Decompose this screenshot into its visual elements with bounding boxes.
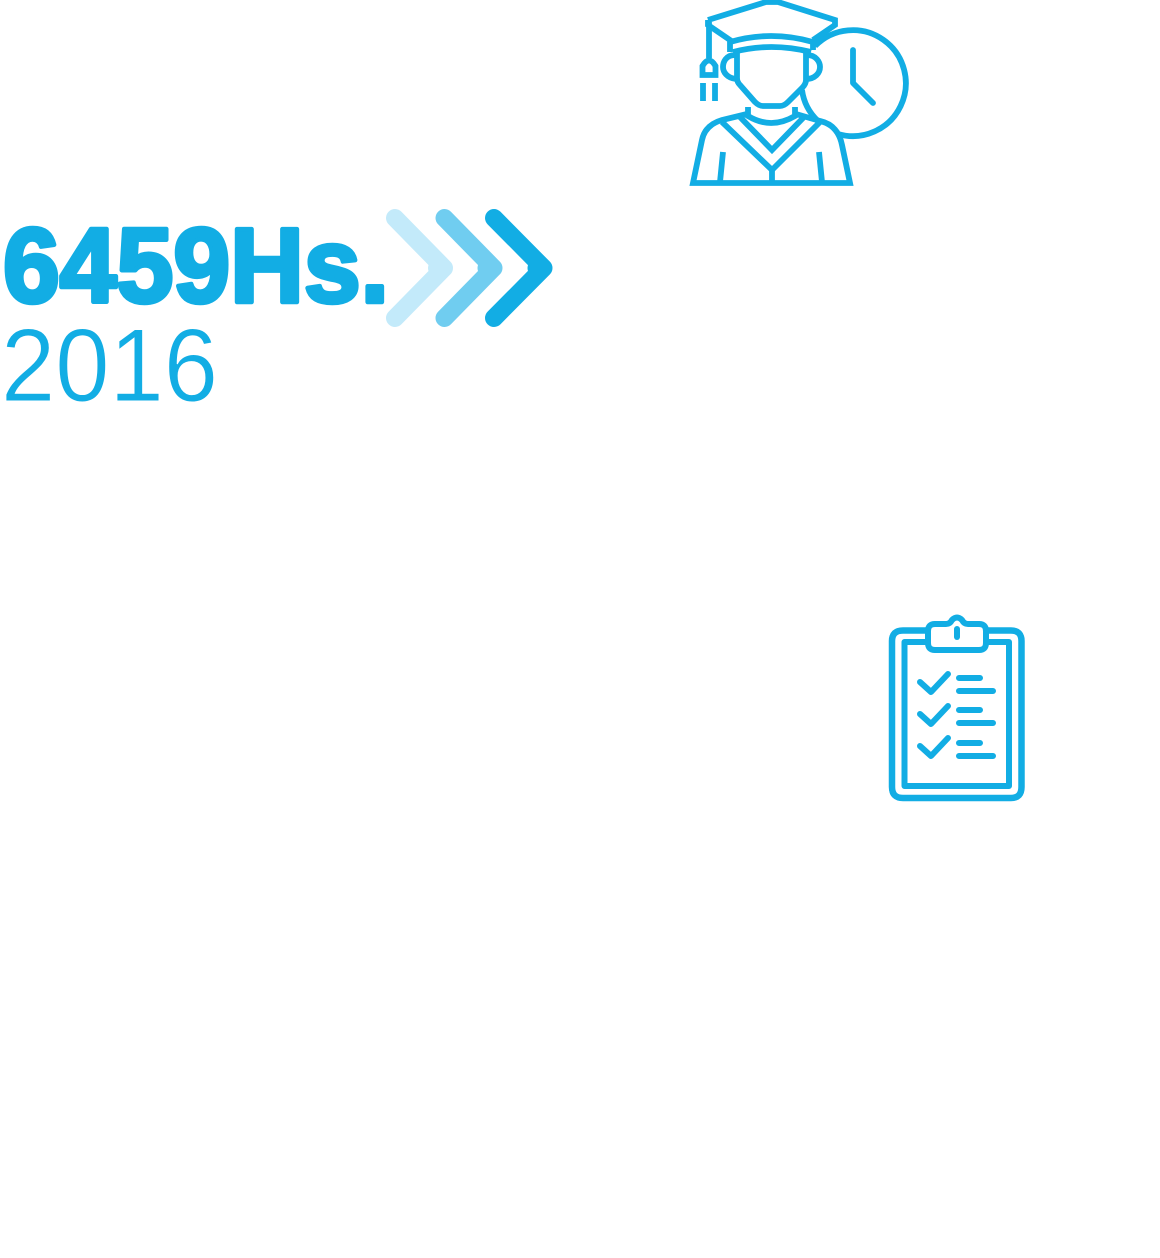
medium chevron	[444, 218, 494, 318]
clipboard board	[892, 630, 1022, 798]
graduate gown	[693, 107, 850, 183]
heading: year: 2016	[1, 308, 218, 424]
checklist rows	[920, 674, 993, 756]
head	[723, 52, 820, 106]
heading: total hours: 6459Hs.	[3, 207, 389, 325]
arrow: triple chevrons	[395, 218, 544, 318]
clock face	[802, 30, 906, 136]
clip	[928, 618, 986, 650]
tassel	[702, 22, 716, 101]
icon: clipboard checklist	[892, 618, 1022, 798]
graduation cap	[708, 2, 835, 52]
light chevron	[395, 218, 444, 318]
paper sheet	[904, 642, 1009, 786]
icon: graduate with clock	[693, 2, 906, 183]
dark chevron	[494, 218, 544, 318]
